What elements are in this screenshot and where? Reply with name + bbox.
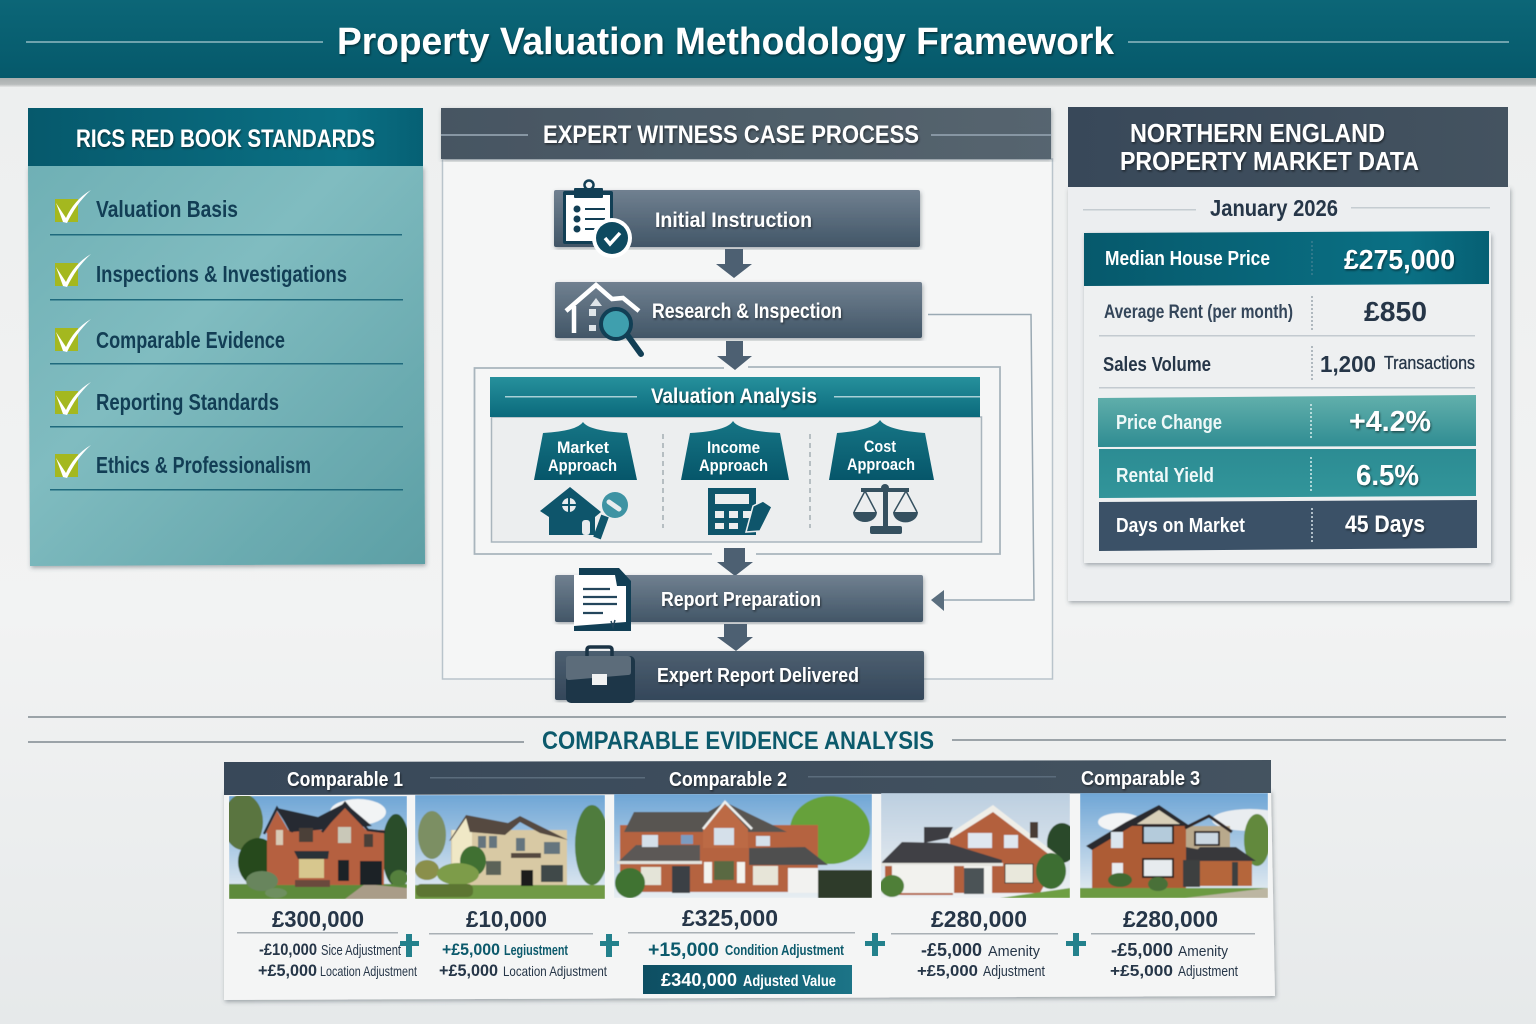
checklist item: inspections and investigations: Inspections & Investigations xyxy=(96,261,347,287)
checklist item: ethics and professionalism xyxy=(50,445,403,490)
checklist item: comparable evidence: Comparable Evidence xyxy=(96,327,285,353)
row: average rent: Average Rent (per month) xyxy=(1104,302,1293,323)
panel heading: NORTHERN ENGLAND xyxy=(1130,118,1385,148)
method: market approach: Market xyxy=(557,438,609,457)
step: report preparation: Report Preparation xyxy=(661,589,821,611)
date line: January 2026 xyxy=(1210,195,1338,221)
comparable column 5 values: Amenity xyxy=(1178,943,1228,960)
step: report preparation xyxy=(555,568,923,631)
comparable column 2 values: +£5,000 xyxy=(439,961,498,980)
comparable column 4 values: £280,000 xyxy=(931,906,1027,932)
sub-heading: Valuation Analysis xyxy=(651,385,817,408)
row: median house price: £275,000 xyxy=(1344,244,1455,275)
comparable column 1 values: £300,000 xyxy=(272,906,364,932)
photo: brick house with dark window frames xyxy=(1080,793,1288,898)
feedback connector arrow xyxy=(928,314,1034,611)
panel heading: PROPERTY MARKET DATA xyxy=(1120,146,1419,176)
row: average rent xyxy=(1099,296,1475,336)
step: expert report delivered: Expert Report Delivered xyxy=(657,665,859,687)
row: price change xyxy=(1098,395,1476,447)
checklist item: comparable evidence xyxy=(50,319,403,364)
arrow: down to research xyxy=(716,249,752,278)
arrow: down to expert report delivered xyxy=(717,624,753,651)
checklist item: reporting standards xyxy=(50,382,403,428)
comparable column 3 values xyxy=(628,905,855,994)
photo: cream rendered house xyxy=(415,795,609,899)
table header: Comparable 3 xyxy=(1081,768,1200,790)
method: market approach xyxy=(534,422,637,538)
checklist item: valuation basis xyxy=(50,190,402,236)
comparable column 4 values: +£5,000 xyxy=(917,963,978,980)
icon: balance scales xyxy=(853,484,918,534)
row: rental yield: 6.5% xyxy=(1356,460,1419,492)
adjusted value callout xyxy=(643,965,852,994)
row: days on market xyxy=(1099,500,1477,551)
row: sales volume: Transactions xyxy=(1384,353,1475,373)
arrow: down to valuation analysis xyxy=(717,341,752,370)
panel heading xyxy=(1120,118,1419,176)
group: valuation analysis xyxy=(474,367,1000,554)
method: cost approach: Approach xyxy=(847,455,915,474)
row: median house price xyxy=(1084,231,1489,286)
row: sales volume: 1,200 xyxy=(1320,351,1376,377)
comparable column 1 values: Sice Adjustment xyxy=(321,942,402,959)
icon: plus between comparables xyxy=(400,934,419,957)
comparable column 1 values xyxy=(237,906,417,980)
comparable column 4 values: Adjustment xyxy=(983,963,1046,980)
comparable column 1 values: -£10,000 xyxy=(259,940,317,959)
icon: report document xyxy=(574,568,631,631)
adjusted value callout: Adjusted Value xyxy=(743,973,836,990)
icon: house with magnifier xyxy=(566,285,641,354)
comparable column 2 values xyxy=(429,906,607,980)
comparable column 1 values: +£5,000 xyxy=(258,961,317,980)
icon: calculator and pencil xyxy=(708,488,772,535)
row: price change: +4.2% xyxy=(1349,406,1431,438)
step: research and inspection xyxy=(555,282,922,354)
row: sales volume: Sales Volume xyxy=(1103,354,1211,376)
comparable column 2 values: £10,000 xyxy=(466,906,547,932)
comparable column 4 values: -£5,000 xyxy=(921,940,982,960)
row: median house price: Median House Price xyxy=(1105,248,1270,270)
icon: briefcase xyxy=(566,647,635,703)
row: rental yield xyxy=(1099,449,1476,498)
panel: RICS Red Book standards xyxy=(28,108,425,566)
table header: Comparable 1 xyxy=(287,769,403,791)
step: initial instruction: Initial Instruction xyxy=(655,209,812,232)
arrow: down to report preparation xyxy=(717,548,753,576)
comparable column 4 values: Amenity xyxy=(988,943,1040,960)
comparable column 3 values: +15,000 xyxy=(648,940,719,961)
row: price change: Price Change xyxy=(1116,412,1222,434)
panel: northern England property market data xyxy=(1068,107,1510,601)
data table xyxy=(1084,231,1491,563)
panel: comparable evidence table xyxy=(223,760,1288,1000)
comparable column 2 values: +£5,000 xyxy=(442,940,500,959)
checklist item: reporting standards: Reporting Standards xyxy=(96,389,279,415)
method: income approach xyxy=(681,421,789,535)
checklist item: inspections and investigations xyxy=(50,254,403,300)
panel heading: EXPERT WITNESS CASE PROCESS xyxy=(543,121,919,149)
row: rental yield: Rental Yield xyxy=(1116,465,1214,487)
adjusted value callout: £340,000 xyxy=(661,970,737,990)
checklist item: ethics and professionalism: Ethics & Professionalism xyxy=(96,452,311,478)
method: cost approach: Cost xyxy=(864,437,896,456)
step: expert report delivered xyxy=(555,647,924,703)
step: research and inspection: Research & Inspection xyxy=(652,300,842,323)
method: cost approach xyxy=(829,420,934,534)
icon: plus between comparables xyxy=(1066,933,1086,956)
photo: large brick house with garage xyxy=(614,794,872,898)
photo: brick house with white garage door xyxy=(880,793,1077,898)
row: sales volume xyxy=(1099,346,1475,388)
table header xyxy=(224,760,1271,795)
row: days on market: 45 Days xyxy=(1345,511,1425,538)
checklist item: valuation basis: Valuation Basis xyxy=(96,196,238,222)
row: days on market: Days on Market xyxy=(1116,515,1245,537)
row: average rent: £850 xyxy=(1364,296,1427,327)
comparable column 5 values: +£5,000 xyxy=(1110,963,1173,980)
comparable column 4 values xyxy=(891,906,1058,980)
icon: plus between comparables xyxy=(600,934,619,957)
step: initial instruction xyxy=(554,180,920,258)
table header: Comparable 2 xyxy=(669,769,787,791)
panel: expert witness case process xyxy=(441,108,1052,703)
method: income approach: Approach xyxy=(699,456,768,475)
comparable column 3 values: Condition Adjustment xyxy=(725,942,844,959)
section divider and heading: comparable evidence analysis: COMPARABLE EVIDENCE ANALYSIS xyxy=(542,727,934,755)
photo: brick detached house xyxy=(223,794,410,899)
comparable column 3 values: £325,000 xyxy=(682,905,778,931)
method: market approach: Approach xyxy=(548,456,617,475)
comparable column 2 values: Location Adjustment xyxy=(503,963,607,979)
panel heading: RICS RED BOOK STANDARDS xyxy=(76,125,375,153)
comparable column 2 values: Legiustment xyxy=(504,942,568,959)
comparable column 5 values: £280,000 xyxy=(1123,906,1218,932)
icon: house and key xyxy=(540,487,628,538)
comparable column 5 values: -£5,000 xyxy=(1111,940,1173,960)
method: income approach: Income xyxy=(707,438,760,457)
comparable column 1 values: Location Adjustment xyxy=(320,963,417,979)
title: Property Valuation Methodology Framework xyxy=(337,21,1115,63)
comparable column 5 values: Adjustment xyxy=(1178,963,1239,980)
icon: clipboard with check xyxy=(563,180,632,258)
icon: plus between comparables xyxy=(865,933,885,956)
title banner xyxy=(0,0,1536,87)
comparable column 5 values xyxy=(1091,906,1255,980)
